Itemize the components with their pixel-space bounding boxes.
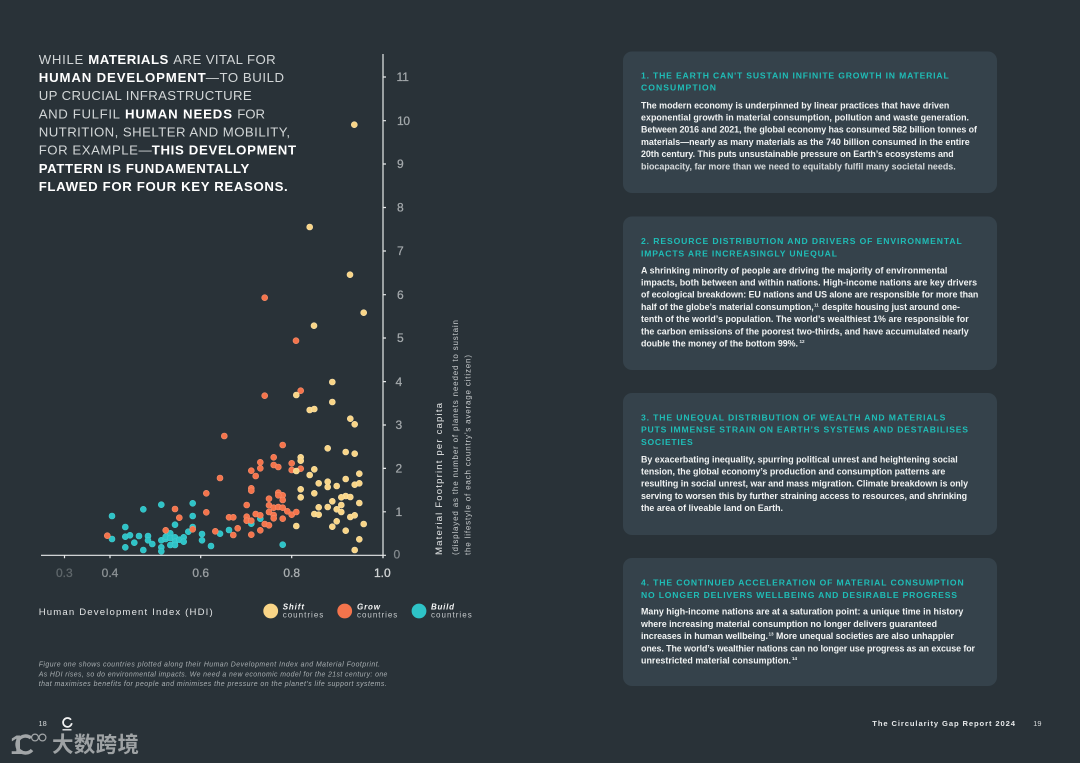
legend: countries xyxy=(357,610,397,619)
body: reason 2: A shrinking minority of people are driving the majority of environmental xyxy=(641,265,947,275)
heading: reason 3: 3. THE UNEQUAL DISTRIBUTION OF WEALTH AND MATERIALS xyxy=(641,412,946,422)
data points: grow countries xyxy=(104,295,304,539)
body: reason 1: The modern economy is underpinned by linear practices that have driven xyxy=(641,100,949,110)
heading: reason 3: SOCIETIES xyxy=(641,437,693,447)
title statement: THIS DEVELOPMENT xyxy=(152,143,296,158)
title statement: —TO BUILD xyxy=(206,70,284,85)
body: reason 2: the carbon emissions of the poorest two-thirds, and have accumulated nearly xyxy=(641,326,969,336)
body: reason 4: Many high-income nations are at a saturation point: a unique time in history xyxy=(641,607,963,617)
title statement: WHILE xyxy=(39,52,84,67)
body: reason 4 xyxy=(640,607,976,666)
heading: reason 4: 4. THE CONTINUED ACCELERATION OF MATERIAL CONSUMPTION xyxy=(641,578,964,588)
y axis title: (displayed as the number of planets needed to sustain xyxy=(451,320,460,555)
data points: shift countries xyxy=(293,122,367,553)
body: reason 2: of ecological breakdown: EU nations and US alone are responsible for more than xyxy=(641,290,978,300)
body: reason 3: By exacerbating inequality, spurring political unrest and heightening social xyxy=(641,454,958,464)
title statement: UP CRUCIAL INFRASTRUCTURE xyxy=(39,88,252,103)
body: reason 4: unrestricted material consumption. xyxy=(641,656,791,666)
body: reason 4: 14 xyxy=(792,656,798,661)
x axis value labels: 0.4 xyxy=(102,566,119,580)
title statement: PATTERN IS FUNDAMENTALLY xyxy=(39,161,250,176)
figure caption: that maximises benefits for people and minimises the pressure on the planet’s life support systems. xyxy=(39,681,387,688)
heading: reason 1: 1. THE EARTH CAN'T SUSTAIN INFINITE GROWTH IN MATERIAL xyxy=(641,70,949,80)
title statement xyxy=(39,52,296,194)
body: reason 1: Between 2016 and 2021, the global economy has consumed 582 billion tonnes of xyxy=(641,125,977,135)
watermark logo xyxy=(10,730,46,760)
y axis value labels xyxy=(394,70,410,561)
y axis value labels: 6 xyxy=(397,288,404,302)
x axis value labels: 1.0 xyxy=(374,566,391,580)
body: reason 2: despite housing just around one- xyxy=(822,302,960,312)
title statement: NUTRITION, SHELTER AND MOBILITY, xyxy=(39,124,290,140)
heading: reason 2: IMPACTS ARE INCREASINGLY UNEQUAL xyxy=(641,248,837,258)
body: reason 2: 12 xyxy=(800,339,805,344)
body: reason 2: tenth of the world’s population. The world’s wealthiest 1% are responsible for xyxy=(641,314,969,324)
title statement: MATERIALS xyxy=(88,52,169,67)
body: reason 3 xyxy=(641,454,968,513)
figure caption: As HDI rises, so do environmental impacts. We need a new economic model for the 21st century: one xyxy=(38,671,388,678)
title statement: HUMAN DEVELOPMENT xyxy=(39,70,206,85)
title statement: AND FULFIL xyxy=(39,106,120,121)
heading: reason 3 xyxy=(641,412,968,447)
x axis title: Human Development Index (HDI) xyxy=(39,607,213,618)
page number right: 19 xyxy=(1033,719,1042,728)
title statement: FOR EXAMPLE— xyxy=(39,143,153,158)
body: reason 1: 20th century. This puts unsustainable pressure on Earth’s ecosystems and xyxy=(641,149,954,159)
watermark logo: 1 xyxy=(10,730,25,760)
y axis value labels: 0 xyxy=(394,548,400,562)
y axis value labels: 8 xyxy=(397,201,404,215)
page number left: 18 xyxy=(38,719,47,728)
y axis value labels: 1 xyxy=(396,505,402,519)
scatter chart axes xyxy=(41,54,386,558)
y axis value labels: 11 xyxy=(396,70,409,84)
figure caption: Figure one shows countries plotted along their Human Development Index and Material Footprint. xyxy=(39,661,380,668)
y axis title: the lifestyle of each country’s average citizen) xyxy=(464,355,472,555)
title statement: ARE VITAL FOR xyxy=(173,52,276,67)
footer report title: The Circularity Gap Report 2024 xyxy=(872,719,1016,728)
y axis value labels: 9 xyxy=(397,157,404,171)
body: reason 2: double the money of the bottom 99%. xyxy=(641,338,798,348)
heading: reason 4: NO LONGER DELIVERS WELLBEING AND DESIRABLE PROGRESS xyxy=(641,590,957,600)
body: reason 4: ones. The world’s wealthier nations can no longer use progress as an excuse for xyxy=(641,643,976,653)
y axis value labels: 5 xyxy=(397,331,404,345)
body: reason 1: materials—nearly as many materials as the 740 billion consumed in the entire xyxy=(641,137,970,147)
body: reason 4: where increasing material consumption no longer delivers guaranteed xyxy=(640,619,937,629)
heading: reason 4 xyxy=(641,578,964,600)
watermark text: 大数跨境 xyxy=(52,733,139,757)
panel: reason 2 xyxy=(623,216,997,370)
title statement: FLAWED FOR FOUR KEY REASONS. xyxy=(39,179,288,194)
heading: reason 1 xyxy=(641,70,949,93)
x axis value labels xyxy=(56,566,391,580)
body: reason 3: tension, the global economy’s production and consumption patterns are xyxy=(641,466,945,476)
body: reason 1: biocapacity, far more than we need to equitably fulfil many societal needs. xyxy=(641,161,956,171)
heading: reason 3: PUTS IMMENSE STRAIN ON EARTH’S SYSTEMS AND DESTABILISES xyxy=(641,425,968,435)
legend xyxy=(263,602,472,619)
x axis value labels: 0.3 xyxy=(56,566,73,580)
body: reason 2: 11 xyxy=(814,302,819,308)
y axis value labels: 7 xyxy=(397,244,404,258)
data points: build countries xyxy=(109,500,286,554)
legend: countries xyxy=(431,610,472,619)
body: reason 3: the area of liveable land on Earth. xyxy=(641,503,783,513)
y axis title xyxy=(434,320,472,555)
heading: reason 1: CONSUMPTION xyxy=(641,83,716,93)
figure caption xyxy=(38,661,388,688)
x axis value labels: 0.6 xyxy=(192,566,209,580)
body: reason 2: impacts, both between and within nations. High-income nations are key drivers xyxy=(641,278,977,288)
panel: reason 4 xyxy=(623,558,997,686)
y axis value labels: 2 xyxy=(396,462,402,476)
body: reason 2 xyxy=(641,265,978,348)
legend: Shift xyxy=(283,602,304,611)
body: reason 1: exponential growth in material consumption, pollution and waste generation. xyxy=(641,112,969,122)
body: reason 3: resulting in social unrest, war and mass migration. Climate breakdown is only xyxy=(641,479,968,489)
legend: Build xyxy=(431,602,455,611)
y axis value labels: 10 xyxy=(397,114,410,128)
y axis value labels: 4 xyxy=(396,375,402,389)
title statement: FOR xyxy=(237,106,265,121)
body: reason 3: serving to worsen this by further straining access to resources, and shrinking xyxy=(641,491,967,501)
icon: circle logo xyxy=(62,718,72,730)
body: reason 4: increases in human wellbeing. xyxy=(641,631,768,641)
y axis title: Material Footprint per capita xyxy=(434,402,445,555)
heading: reason 2: 2. RESOURCE DISTRIBUTION AND DRIVERS OF ENVIRONMENTAL xyxy=(641,236,962,246)
y axis value labels: 3 xyxy=(396,418,402,432)
body: reason 1 xyxy=(641,100,977,171)
panel: reason 3 xyxy=(623,393,997,535)
x axis value labels: 0.8 xyxy=(283,566,300,580)
panel: reason 1 xyxy=(623,52,997,193)
heading: reason 2 xyxy=(641,236,962,258)
legend: Grow xyxy=(357,602,381,611)
legend: countries xyxy=(283,610,323,619)
body: reason 4: More unequal societies are also unhappier xyxy=(776,631,955,641)
body: reason 2: half of the globe’s material consumption, xyxy=(641,302,814,312)
body: reason 4: 13 xyxy=(768,632,774,637)
title statement: HUMAN NEEDS xyxy=(125,106,232,121)
